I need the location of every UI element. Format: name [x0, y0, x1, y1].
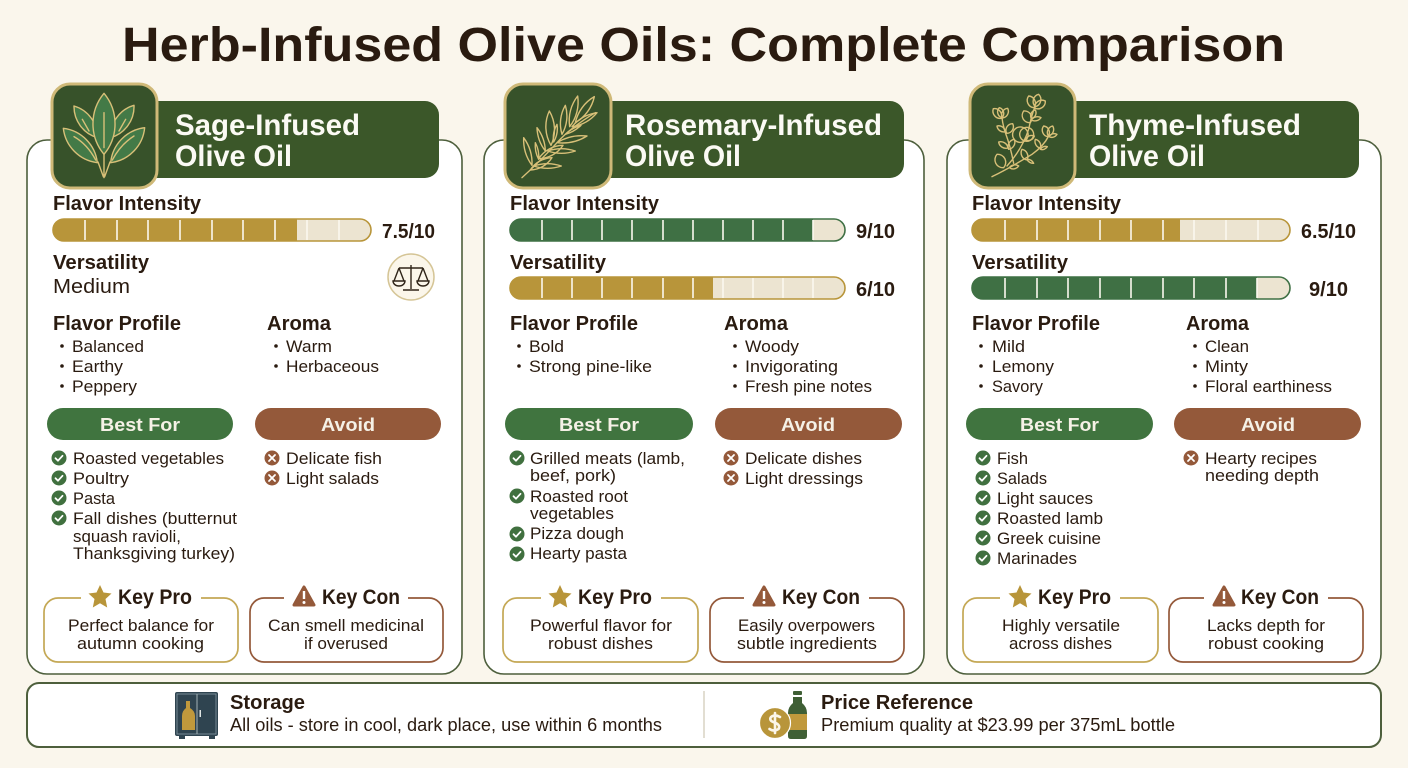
aroma list: Warm — [286, 337, 332, 356]
bar: versatility 9/10 — [972, 277, 1290, 299]
aroma list: Aroma — [1186, 313, 1250, 335]
best for list: beef, pork) — [530, 466, 616, 485]
icon: rosemary sprig — [505, 84, 611, 188]
best for pill: Best For — [100, 414, 180, 435]
best for list: Pizza dough — [530, 524, 624, 543]
flavor profile list — [53, 313, 181, 396]
best for list: Salads — [997, 469, 1047, 488]
key con callout: Can smell medicinal — [268, 616, 424, 635]
bar: flavor intensity 7.5/10 — [53, 219, 371, 241]
title: Herb-Infused Olive Oils: Complete Comparison — [122, 19, 1285, 72]
flavor intensity label: Flavor Intensity — [972, 193, 1122, 215]
best for list: Fall dishes (butternut — [73, 509, 237, 528]
best for list — [976, 449, 1103, 568]
avoid pill — [1174, 408, 1361, 440]
aroma list — [724, 313, 872, 396]
key con callout: Easily overpowers — [738, 616, 875, 635]
icon: sage leaves — [52, 84, 157, 188]
key pro callout: robust dishes — [548, 634, 653, 653]
avoid list: Light salads — [286, 469, 379, 488]
flavor profile list: Bold — [529, 337, 564, 356]
header: thyme: Olive Oil — [1089, 140, 1205, 173]
key pro callout: Highly versatile — [1002, 616, 1120, 635]
avoid list: Delicate dishes — [745, 449, 862, 468]
panel: storage and price footer — [27, 683, 1381, 747]
flavor profile list — [510, 313, 652, 376]
aroma list: Aroma — [724, 313, 789, 335]
avoid list: Delicate fish — [286, 449, 382, 468]
panel: thyme-infused olive oil — [947, 84, 1381, 674]
best for list: Thanksgiving turkey) — [73, 544, 235, 563]
flavor profile list: Lemony — [992, 357, 1055, 376]
avoid list: Light dressings — [745, 469, 863, 488]
best for pill — [47, 408, 233, 440]
best for pill: Best For — [559, 414, 639, 435]
key con callout — [710, 586, 904, 662]
versatility label: Versatility — [972, 252, 1069, 274]
key con callout: Key Con — [322, 586, 400, 609]
aroma list: Floral earthiness — [1205, 377, 1332, 396]
key con callout: robust cooking — [1208, 634, 1324, 653]
flavor profile list: Mild — [992, 337, 1025, 356]
flavor intensity label: Flavor Intensity — [510, 193, 660, 215]
storage text: All oils - store in cool, dark place, use within 6 months — [230, 715, 662, 735]
key pro callout — [963, 585, 1158, 662]
header: sage: Sage-Infused — [175, 109, 360, 142]
avoid list — [264, 449, 382, 488]
key con callout: Lacks depth for — [1207, 616, 1325, 635]
flavor profile list — [972, 313, 1100, 396]
best for list: Marinades — [997, 549, 1077, 568]
versatility label: Versatility — [53, 252, 150, 274]
icon: thyme sprig — [970, 84, 1075, 188]
header: rosemary — [595, 101, 904, 178]
avoid list — [724, 449, 863, 488]
avoid pill: Avoid — [321, 414, 375, 435]
aroma list: Aroma — [267, 313, 332, 335]
aroma list: Fresh pine notes — [745, 377, 872, 396]
header: sage: Olive Oil — [175, 140, 292, 173]
avoid pill: Avoid — [781, 414, 835, 435]
aroma list — [1186, 313, 1332, 396]
key pro callout: Key Pro — [578, 586, 652, 609]
avoid pill — [255, 408, 441, 440]
aroma list: Invigorating — [745, 357, 838, 376]
key pro callout: autumn cooking — [77, 634, 204, 653]
icon: bottle and coin — [760, 691, 807, 739]
icon: storage cabinet — [175, 692, 218, 739]
aroma list — [267, 313, 379, 376]
best for list: Grilled meats (lamb, — [530, 449, 685, 468]
price text: Premium quality at $23.99 per 375mL bottle — [821, 715, 1175, 735]
best for list — [510, 449, 685, 563]
best for list: Hearty pasta — [530, 544, 628, 563]
flavor profile list: Savory — [992, 377, 1043, 396]
avoid list — [1184, 449, 1319, 485]
best for list: Pasta — [73, 489, 116, 508]
best for list: squash ravioli, — [73, 527, 181, 546]
key con callout: Key Con — [782, 586, 860, 609]
key pro callout: across dishes — [1009, 634, 1112, 653]
avoid list: Hearty recipes — [1205, 449, 1317, 468]
value: 9/10: 9/10 — [1309, 279, 1348, 301]
flavor profile list: Flavor Profile — [972, 313, 1100, 335]
aroma list: Clean — [1205, 337, 1249, 356]
key pro callout — [503, 585, 698, 662]
key pro callout: Powerful flavor for — [530, 616, 672, 635]
value: 7.5/10: 7.5/10 — [382, 221, 435, 243]
header: thyme — [1060, 101, 1359, 178]
value: 6/10: 6/10 — [856, 279, 895, 301]
flavor profile list: Flavor Profile — [510, 313, 638, 335]
key pro callout: Key Pro — [118, 586, 192, 609]
key pro callout: Perfect balance for — [68, 616, 214, 635]
best for list: vegetables — [530, 504, 614, 523]
best for list: Roasted lamb — [997, 509, 1103, 528]
best for list: Roasted root — [530, 487, 628, 506]
avoid pill — [715, 408, 902, 440]
best for list: Roasted vegetables — [73, 449, 224, 468]
flavor intensity label: Flavor Intensity — [53, 193, 202, 215]
best for list: Poultry — [73, 469, 130, 488]
bar: flavor intensity 6.5/10 — [972, 219, 1290, 241]
panel: sage-infused olive oil — [27, 84, 462, 674]
value: 9/10: 9/10 — [856, 221, 895, 243]
header: rosemary: Rosemary-Infused — [625, 109, 882, 142]
price text — [821, 692, 1175, 735]
price text: Price Reference — [821, 692, 973, 714]
key con callout — [250, 586, 443, 662]
versatility label: Versatility — [510, 252, 607, 274]
best for list: Greek cuisine — [997, 529, 1101, 548]
flavor profile list: Balanced — [72, 337, 144, 356]
key con callout: subtle ingredients — [737, 634, 877, 653]
flavor profile list: Earthy — [72, 357, 124, 376]
best for pill — [505, 408, 693, 440]
header: sage — [140, 101, 439, 178]
best for list — [52, 449, 237, 563]
flavor profile list: Flavor Profile — [53, 313, 181, 335]
storage text: Storage — [230, 692, 305, 714]
key pro callout — [44, 585, 238, 662]
value: 6.5/10: 6.5/10 — [1301, 221, 1356, 243]
versatility value: medium: Medium — [53, 276, 130, 298]
best for list: Fish — [997, 449, 1028, 468]
flavor profile list: Peppery — [72, 377, 138, 396]
storage text — [230, 692, 662, 735]
key pro callout: Key Pro — [1038, 586, 1111, 609]
bar: versatility 6/10 — [510, 277, 845, 299]
best for pill: Best For — [1020, 414, 1099, 435]
avoid list: needing depth — [1205, 466, 1319, 485]
avoid pill: Avoid — [1241, 414, 1295, 435]
best for pill — [966, 408, 1153, 440]
header: thyme: Thyme-Infused — [1089, 109, 1301, 142]
aroma list: Woody — [745, 337, 800, 356]
header: rosemary: Olive Oil — [625, 140, 741, 173]
panel: rosemary-infused olive oil — [484, 84, 924, 674]
key con callout: Key Con — [1241, 586, 1319, 609]
key con callout — [1169, 586, 1363, 662]
aroma list: Minty — [1205, 357, 1249, 376]
bar: flavor intensity 9/10 — [510, 219, 845, 241]
best for list: Light sauces — [997, 489, 1093, 508]
aroma list: Herbaceous — [286, 357, 379, 376]
flavor profile list: Strong pine-like — [529, 357, 652, 376]
icon: balance scale — [388, 254, 434, 300]
key con callout: if overused — [304, 634, 388, 653]
